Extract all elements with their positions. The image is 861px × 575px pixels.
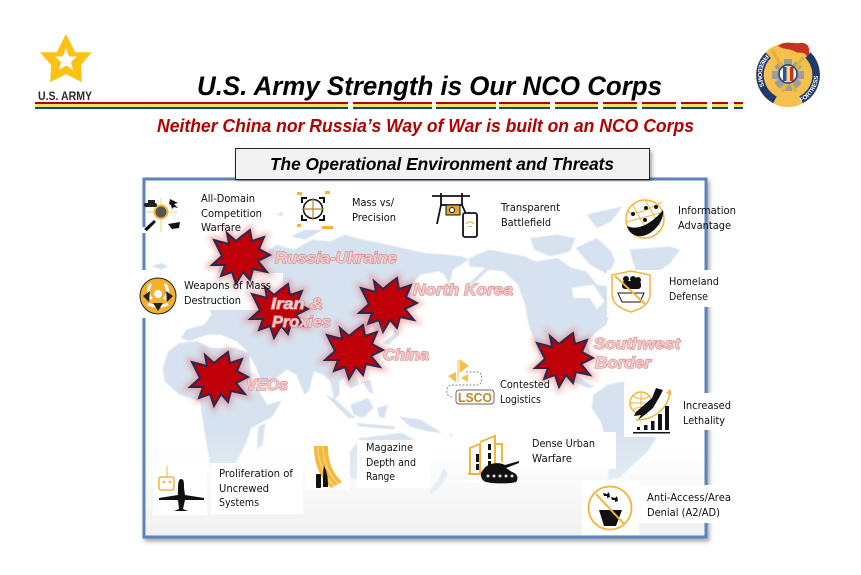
heading box xyxy=(236,148,650,180)
item: Contested Logistics: Logistics xyxy=(500,394,541,406)
item: Mass vs/Precision: Mass vs/ xyxy=(352,197,394,209)
threat: China xyxy=(325,325,429,379)
title: U.S. Army Strength is Our NCO Corps xyxy=(197,71,662,101)
item: Magazine Depth and Range: Depth and xyxy=(366,457,416,469)
icon: all-domain xyxy=(144,198,180,232)
icon: magazine and rounds xyxy=(314,446,342,488)
threat: Southwest Border xyxy=(535,333,681,387)
threat: VEOs xyxy=(190,352,288,406)
icon: LSCO flag: LSCO xyxy=(458,391,492,405)
item: Magazine Depth and Range xyxy=(314,442,416,488)
Freedom's Fortress badge: FREEDOM’S xyxy=(758,54,769,87)
item: Information Advantage: Information xyxy=(678,205,736,217)
threat: VEOs: VEOs xyxy=(246,377,288,394)
item: Proliferation of Uncrewed Systems: Uncrewed xyxy=(219,483,269,495)
item: Information Advantage xyxy=(626,200,736,238)
subtitle: Neither China nor Russia’s Way of War is built on an NCO Corps xyxy=(157,116,694,136)
item: Anti-Access/Area Denial: Denial (A2/AD) xyxy=(647,507,720,519)
threat: Iran & Proxies: Iran & xyxy=(271,296,323,313)
threat: China: China xyxy=(383,347,429,364)
threat: Iran & Proxies: Proxies xyxy=(272,314,331,331)
item: Information Advantage: Advantage xyxy=(678,220,731,232)
item: Mass vs/Precision xyxy=(294,190,396,230)
item: Dense Urban Warfare: Dense Urban xyxy=(532,438,595,450)
icon: network globe xyxy=(626,200,664,238)
icon: no-entry ship and planes xyxy=(588,486,632,530)
threat: Southwest Border: Southwest xyxy=(594,336,681,353)
panel: operational environment map xyxy=(144,179,706,537)
item: Homeland Defense: Homeland xyxy=(669,276,719,288)
item: Proliferation of Uncrewed Systems: Proliferation of xyxy=(219,468,293,480)
threat: Southwest Border: Border xyxy=(595,355,652,372)
item: Homeland Defense: Defense xyxy=(669,291,708,303)
icon: crosshair xyxy=(294,190,334,230)
item: Homeland Defense xyxy=(612,271,719,312)
item: All-Domain Competition Warfare xyxy=(144,193,262,234)
item: Increased Lethality: Increased xyxy=(683,400,731,412)
item: Proliferation of Uncrewed Systems xyxy=(159,466,293,511)
world map xyxy=(152,206,680,495)
threat: Russia-Ukraine: Russia-Ukraine xyxy=(275,250,397,267)
item: Dense Urban Warfare xyxy=(468,436,595,483)
item: Increased Lethality xyxy=(630,388,731,434)
item: Transparent Battlefield: Transparent xyxy=(500,202,560,214)
white label backings xyxy=(139,200,740,535)
item: Weapons of Mass Destruction: Destruction xyxy=(184,295,241,307)
item: Dense Urban Warfare: Warfare xyxy=(532,453,572,465)
icon: shield xyxy=(612,271,650,312)
item: Increased Lethality: Lethality xyxy=(683,415,725,427)
item: All-Domain Competition Warfare: Competition xyxy=(201,208,262,220)
item: All-Domain Competition Warfare: Warfare xyxy=(201,222,241,234)
threat: North Korea: North Korea xyxy=(413,282,513,299)
item: Anti-Access/Area Denial xyxy=(588,486,731,530)
item: Magazine Depth and Range: Magazine xyxy=(366,442,413,454)
item: Anti-Access/Area Denial: Anti-Access/Area xyxy=(647,492,731,504)
threat: Iran & Proxies xyxy=(250,284,331,338)
item: Weapons of Mass Destruction: Weapons of Mass xyxy=(184,280,271,292)
tricolour divider stripes xyxy=(35,102,743,109)
heading box: The Operational Environment and Threats xyxy=(270,154,614,174)
icon: tank and buildings xyxy=(468,436,519,483)
item: Proliferation of Uncrewed Systems: Systems xyxy=(219,497,259,509)
item: Contested Logistics: Contested xyxy=(500,379,550,391)
threat: North Korea xyxy=(359,278,513,332)
icon: controller and UAV xyxy=(159,466,204,511)
U.S. Army logo: U.S. ARMY xyxy=(38,91,92,103)
Freedom's Fortress badge xyxy=(756,42,820,107)
icon: biohazard xyxy=(140,278,176,314)
item: Transparent Battlefield xyxy=(432,193,560,237)
threat: Russia-Ukraine xyxy=(212,230,397,284)
item: Magazine Depth and Range: Range xyxy=(366,471,395,483)
item: Weapons of Mass Destruction xyxy=(140,278,271,314)
icon: drone and phone xyxy=(432,193,477,237)
item: Transparent Battlefield: Battlefield xyxy=(501,217,551,229)
item: Mass vs/Precision: Precision xyxy=(352,212,396,224)
item: All-Domain Competition Warfare: All-Domain xyxy=(201,193,255,205)
Freedom's Fortress badge: FORTRESS xyxy=(799,76,818,102)
U.S. Army logo xyxy=(38,34,92,103)
icon: rifle and rising bars xyxy=(630,388,672,434)
item: Contested Logistics xyxy=(447,360,550,406)
